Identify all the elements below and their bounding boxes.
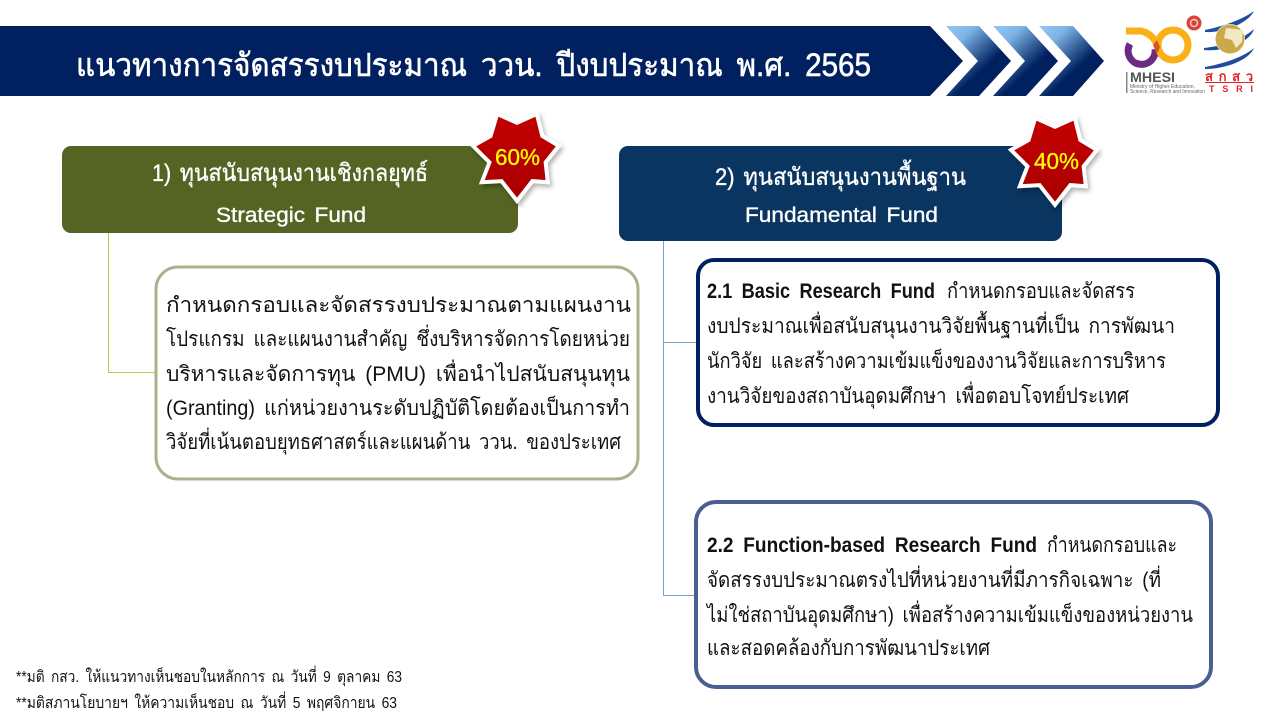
text block: strategic fund description: (Granting) แก่หน่วยงานระดับปฏิบัติโดยต้องเป็นการทำ <box>166 394 630 420</box>
text block: basic research fund description: นักวิจัย และสร้างความเข้มแข็งของงานวิจัยและการบริหาร <box>707 347 1166 373</box>
badge: 60%: 60% <box>495 144 540 170</box>
text block: function-based research fund description: ไม่ใช่สถาบันอุดมศึกษา) เพื่อสร้างความเข้มแข็งของหน่วยงาน <box>705 600 1193 628</box>
connector: strategic fund <box>108 233 156 372</box>
heading: strategic fund Thai: 1) ทุนสนับสนุนงานเชิงกลยุทธ์ <box>152 159 428 188</box>
logo: TSRI: TSRI <box>1209 84 1253 94</box>
text block: basic research fund description: กำหนดกรอบและจัดสรร <box>947 280 1135 303</box>
heading: fundamental fund Thai: 2) ทุนสนับสนุนงานพื้นฐาน <box>715 159 966 192</box>
text block: basic research fund description: งานวิจัยของสถาบันอุดมศึกษา เพื่อตอบโจทย์ประเทศ <box>707 381 1130 409</box>
panel: 2.1 basic research fund <box>698 260 1218 425</box>
footnotes: **มติ กสว. ให้แนวทางเห็นชอบในหลักการ ณ วันที่ 9 ตุลาคม 63 <box>16 665 402 687</box>
panel: 2.2 function-based research fund <box>696 502 1211 687</box>
badge: 60% <box>473 114 559 201</box>
text block: function-based research fund description: และสอดคล้องกับการพัฒนาประเทศ <box>707 637 991 660</box>
heading: fundamental fund English: Fundamental Fund <box>745 204 938 227</box>
badge: 40%: 40% <box>1034 148 1079 174</box>
text block: function-based research fund description: 2.2 Function-based Research Fund <box>707 534 1037 557</box>
footnotes <box>16 665 402 712</box>
text block: strategic fund description <box>166 294 631 455</box>
panel: strategic fund description <box>156 267 638 479</box>
logo: MHESI <box>1126 16 1205 95</box>
logo: TSRI <box>1204 11 1254 94</box>
panel: fundamental fund heading <box>619 146 1062 241</box>
logo: MHESI: Ministry of Higher Education, <box>1130 84 1195 90</box>
connector: fundamental fund <box>664 241 698 596</box>
title: แนวทางการจัดสรรงบประมาณ ววน. ปีงบประมาณ พ.ศ. 2565 <box>76 47 871 83</box>
header banner <box>0 26 1104 96</box>
logo: TSRI: สกสว <box>1205 69 1253 84</box>
text block: strategic fund description: บริหารและจัดการทุน (PMU) เพื่อนำไปสนับสนุนทุน <box>166 359 630 387</box>
header bar <box>0 26 963 96</box>
text block: function-based research fund description: จัดสรรงบประมาณตรงไปที่หน่วยงานที่มีภารกิจเฉพาะ (ที่ <box>707 565 1161 592</box>
logo: MHESI: Science, Research and Innovation <box>1130 89 1205 95</box>
badge: 40% <box>1011 118 1097 205</box>
text block: function-based research fund description <box>705 534 1193 660</box>
footnotes: **มติสภานโยบายฯ ให้ความเห็นชอบ ณ วันที่ 5 พฤศจิกายน 63 <box>16 691 397 712</box>
text block: basic research fund description: งบประมาณเพื่อสนับสนุนงานวิจัยพื้นฐานที่เป็น การพัฒนา <box>707 311 1175 339</box>
panel: strategic fund heading <box>62 146 518 233</box>
text block: strategic fund description: กำหนดกรอบและจัดสรรงบประมาณตามแผนงาน <box>166 294 631 317</box>
text block: basic research fund description: 2.1 Basic Research Fund <box>707 280 935 303</box>
header chevron arrows <box>946 26 1104 96</box>
logo: MHESI: MHESI <box>1130 69 1175 85</box>
text block: strategic fund description: วิจัยที่เน้นตอบยุทธศาสตร์และแผนด้าน ววน. ของประเทศ <box>166 427 622 455</box>
text block: basic research fund description <box>707 280 1175 409</box>
text block: strategic fund description: โปรแกรม และแผนงานสำคัญ ชึ่งบริหารจัดการโดยหน่วย <box>166 324 630 351</box>
text block: function-based research fund description: กำหนดกรอบและ <box>1047 534 1177 557</box>
heading: strategic fund English: Strategic Fund <box>216 204 366 227</box>
